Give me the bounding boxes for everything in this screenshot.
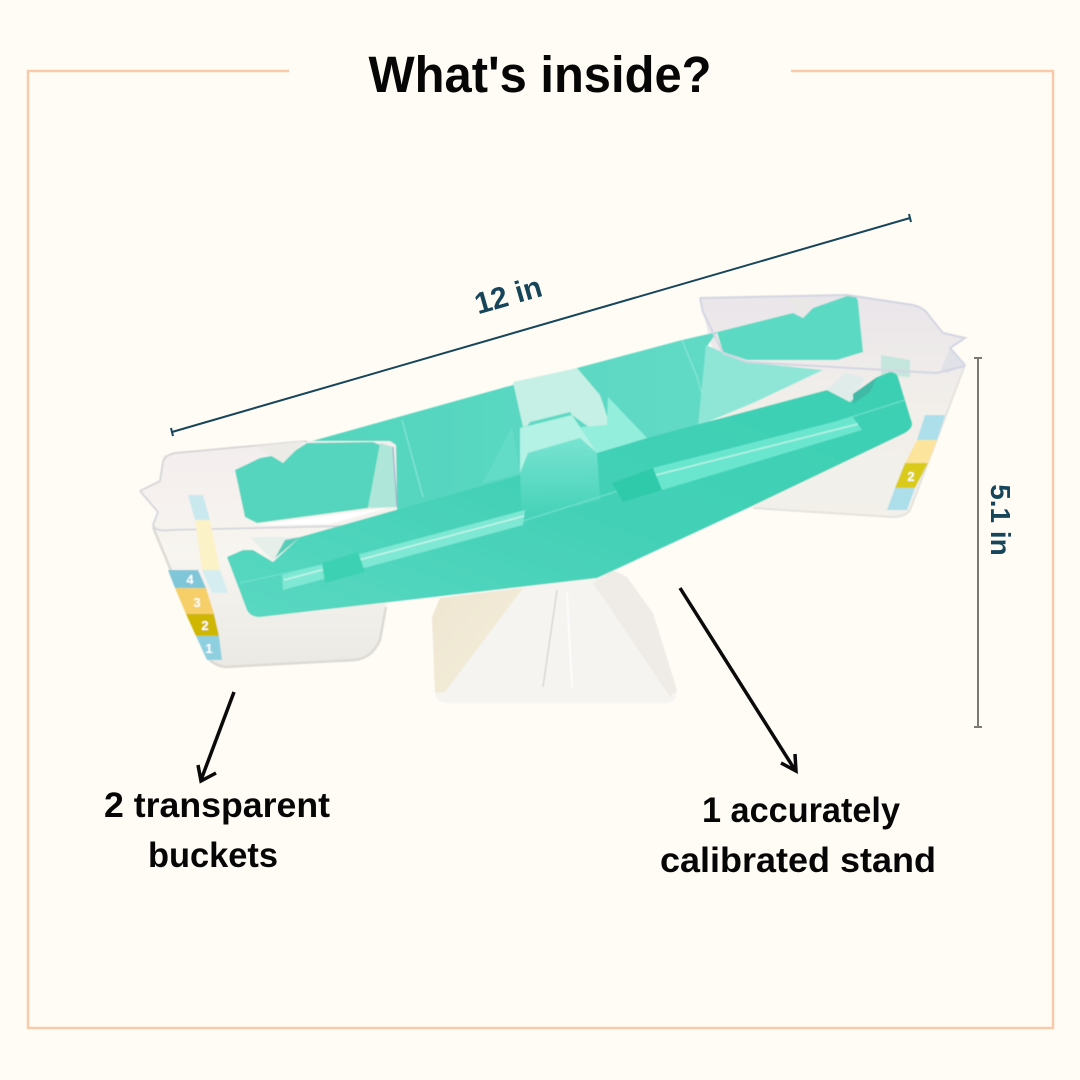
caption: stand: 1 accurately — [702, 791, 901, 830]
left inner flap — [235, 441, 397, 525]
teal beam front — [227, 372, 912, 617]
title: What's inside? — [368, 46, 712, 103]
right bucket rim — [700, 295, 965, 373]
bucket scale bands: 2 — [907, 469, 915, 484]
caption: stand — [660, 791, 936, 880]
bucket scale bands — [887, 415, 945, 510]
label: 5.1 in: 5.1 in — [985, 484, 1016, 556]
caption: buckets — [104, 786, 330, 875]
right inner flap — [717, 295, 863, 360]
caption: buckets: buckets — [148, 836, 278, 875]
bucket scale bands — [168, 495, 228, 660]
left rail — [282, 510, 525, 590]
right bucket — [700, 295, 965, 517]
teal trough interior — [305, 332, 823, 512]
weighing scale product — [140, 295, 965, 703]
bucket scale bands: 2 — [201, 618, 209, 633]
dimension line: height — [974, 358, 982, 727]
right rail — [612, 417, 862, 502]
stand — [432, 570, 677, 703]
center block — [513, 368, 647, 473]
caption: stand: calibrated stand — [660, 841, 936, 880]
caption: buckets: 2 transparent — [104, 786, 330, 825]
dimension line: width — [171, 214, 911, 436]
arrow to stand — [680, 588, 796, 771]
bucket scale bands: 1 — [205, 641, 213, 656]
arrow to bucket — [198, 692, 234, 781]
label: 12 in: 12 in — [471, 271, 546, 321]
bucket scale bands: 3 — [193, 595, 201, 610]
bucket scale bands: 4 — [186, 572, 194, 587]
left bucket — [140, 441, 397, 667]
